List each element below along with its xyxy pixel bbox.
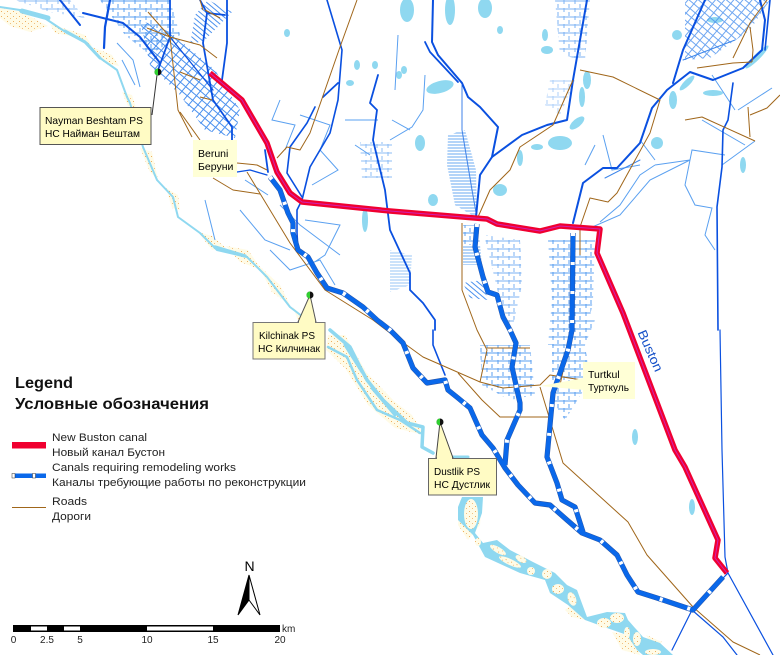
legend heading: Legend xyxy=(15,375,73,392)
legend item: New Buston canal xyxy=(12,432,165,459)
label: Beruni town: Beruni xyxy=(198,148,228,160)
legend xyxy=(12,375,306,523)
scale bar: 20 xyxy=(274,635,286,646)
legend item: canals requiring remodeling works: Canals requiring remodeling works xyxy=(52,462,237,474)
callout: Kilchinak PS xyxy=(253,292,325,359)
label: Beruni town xyxy=(193,140,237,177)
callout: Nayman Beshtam PS: НС Найман Бештам xyxy=(45,128,140,140)
callout: Nayman Beshtam PS: Nayman Beshtam PS xyxy=(45,115,143,127)
legend item: roads: Дороги xyxy=(52,511,91,523)
legend item: roads xyxy=(12,496,91,523)
callout: Nayman Beshtam PS xyxy=(40,68,162,144)
legend heading: Условные обозначения xyxy=(15,396,209,413)
canals requiring remodeling works xyxy=(270,177,723,610)
callout: Dustlik PS xyxy=(428,418,496,495)
legend item: canals requiring remodeling works: Каналы требующие работы по реконструкции xyxy=(52,477,306,489)
callout: Dustlik PS: Dustlik PS xyxy=(434,466,480,478)
legend item: New Buston canal: New Buston canal xyxy=(52,432,147,444)
label: Beruni town: Беруни xyxy=(198,161,234,173)
scale bar: 10 xyxy=(141,635,153,646)
scale bar: km xyxy=(282,624,295,635)
legend item: canals requiring remodeling works xyxy=(12,462,306,489)
legend item: roads: Roads xyxy=(52,496,88,508)
New Buston canal xyxy=(210,73,727,573)
label: Turtkul town: Турткуль xyxy=(588,382,630,394)
callout: Kilchinak PS: Kilchinak PS xyxy=(259,330,315,342)
legend item: New Buston canal: Новый канал Бустон xyxy=(52,447,165,459)
scale bar: 5 xyxy=(77,635,83,646)
label: Turtkul town xyxy=(540,362,635,399)
label: Buston canal name: Buston xyxy=(635,328,666,374)
irrigation network: fine canals xyxy=(15,0,772,420)
label: Turtkul town: Turtkul xyxy=(588,369,620,381)
north arrow xyxy=(238,558,260,615)
legend heading xyxy=(15,375,209,413)
lakes xyxy=(284,0,770,515)
scale bar xyxy=(11,624,295,646)
scale bar: 0 xyxy=(11,635,17,646)
north arrow: N xyxy=(244,558,255,574)
scale bar: 2.5 xyxy=(40,635,54,646)
callout: Dustlik PS: НС Дустлик xyxy=(434,479,490,491)
callout: Kilchinak PS: НС Килчинак xyxy=(258,343,320,355)
scale bar: 15 xyxy=(207,635,219,646)
